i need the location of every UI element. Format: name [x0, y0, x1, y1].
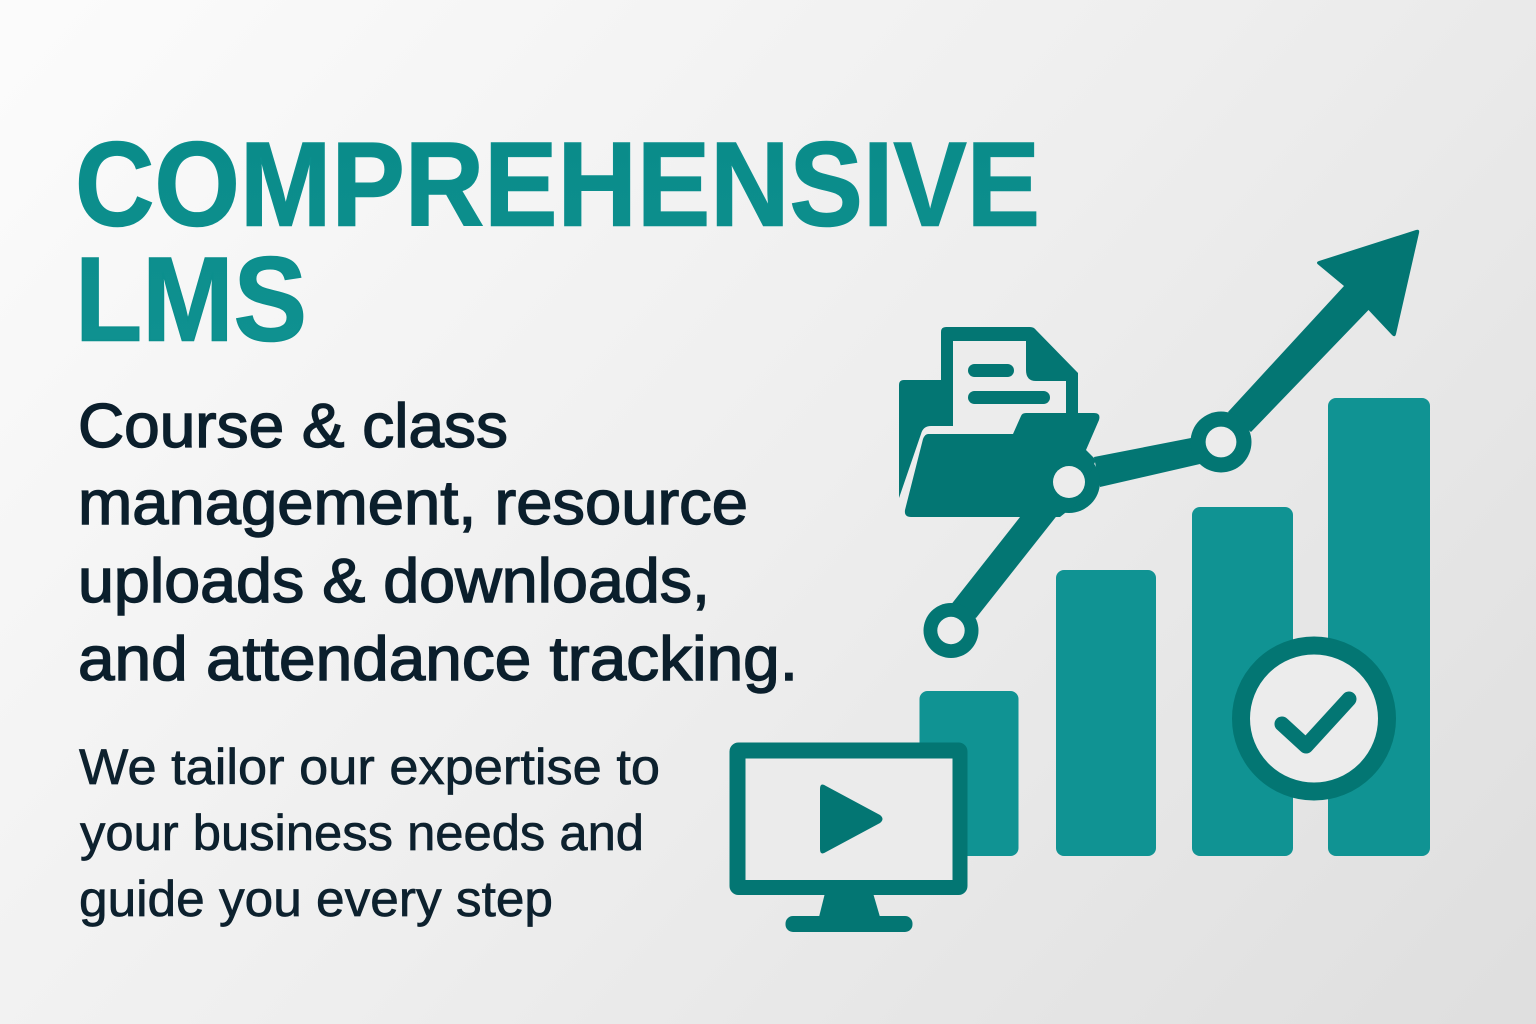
title: COMPREHENSIVE — [75, 118, 1040, 252]
subheading text block — [78, 392, 798, 694]
body text block: guide you every step — [79, 871, 553, 927]
subheading text block: Course & class — [78, 392, 508, 461]
subheading text block: management, resource — [78, 469, 748, 538]
subheading text block: uploads & downloads, — [78, 547, 710, 616]
icon: monitor with play button — [730, 742, 968, 932]
body text block: your business needs and — [80, 805, 644, 861]
icon: check badge — [1241, 646, 1387, 792]
icon: folder with document — [899, 327, 1099, 517]
title — [75, 118, 1040, 366]
subheading text block: and attendance tracking. — [78, 625, 798, 694]
trend line with arrow — [924, 230, 1419, 658]
body text block — [79, 739, 660, 927]
bar chart — [920, 398, 1430, 856]
body text block: We tailor our expertise to — [79, 739, 660, 795]
title: LMS — [75, 232, 307, 366]
